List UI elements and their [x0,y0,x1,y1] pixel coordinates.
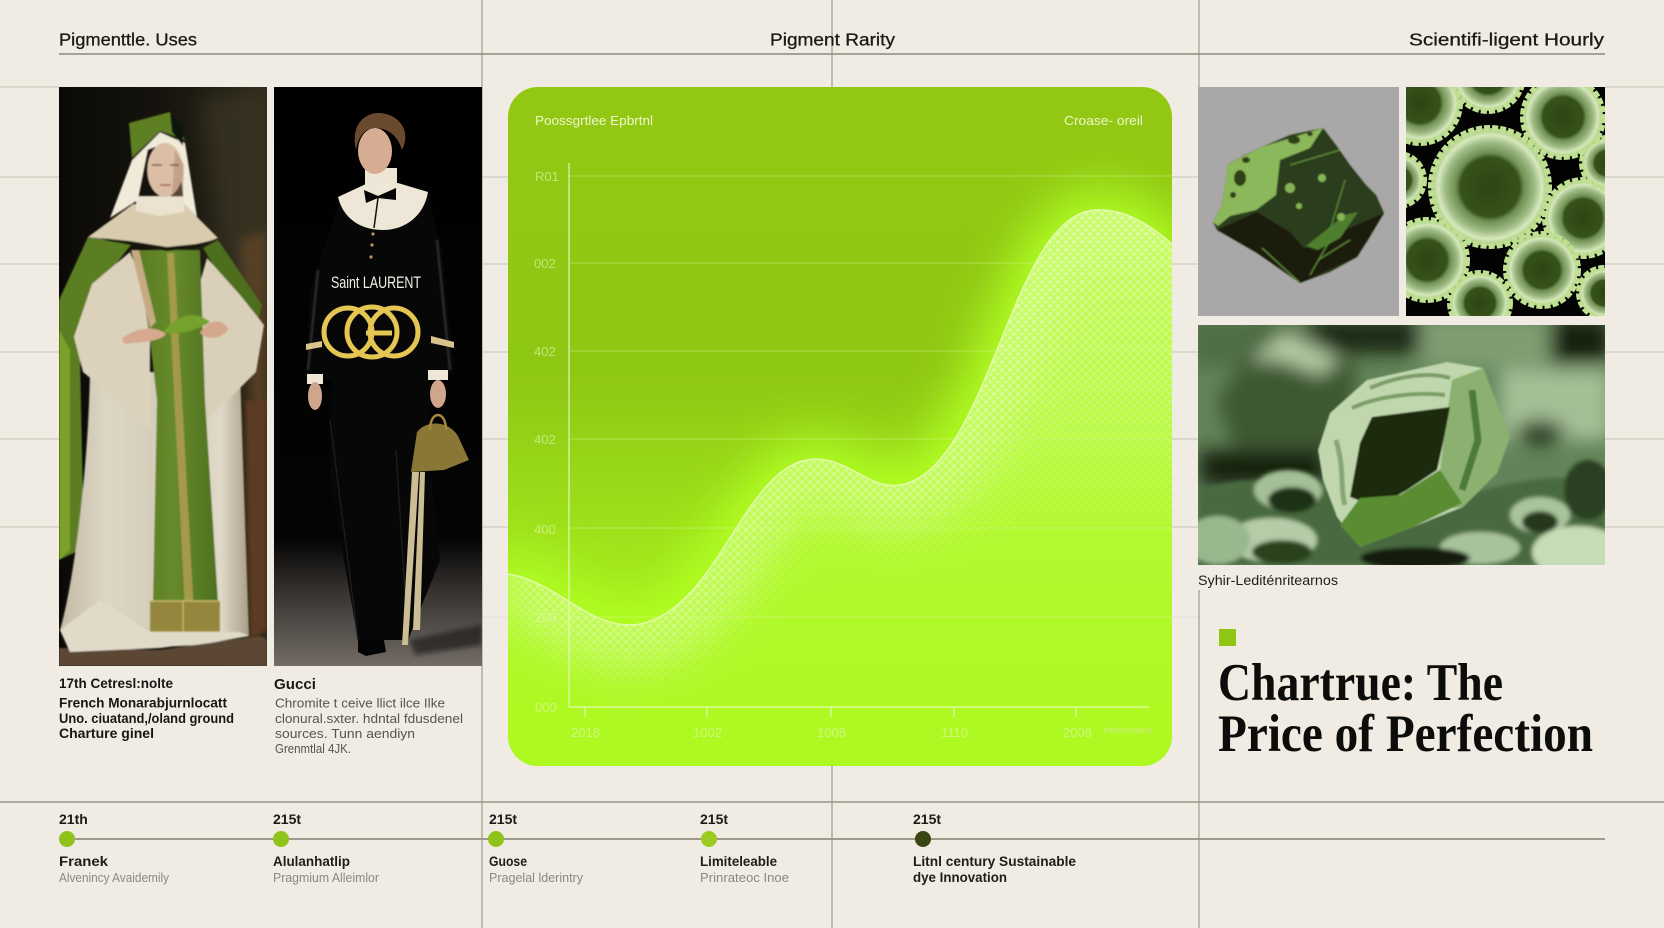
caption: gucci: clonural.sxter. hdntal fdusdenel [275,711,463,726]
milestone 5: dye Innovation [913,870,1007,885]
hands [308,382,322,410]
image: pigment rock specimen [1198,87,1399,316]
y axis labels: 402 [534,432,556,447]
head [358,128,392,174]
floor [59,636,267,666]
title [1218,654,1593,763]
bag straps [402,472,425,645]
robe [60,372,249,652]
chart heading right: Croase- oreil [1064,113,1143,128]
hood [110,132,197,218]
x axis labels: Interpolation [1103,725,1153,735]
caption: 17th century: 17th Cetresl:nolte [59,676,173,691]
area with mosaic texture [508,209,1172,766]
grid lines [569,176,1172,617]
y axis labels [534,169,559,715]
caption: gucci [274,676,463,756]
header rule [59,53,1605,55]
gold handbag [411,423,469,472]
milestone 5: 215t [913,811,941,827]
caption: gucci: Chromite t ceive llict ilce Ilke [275,696,445,710]
panel: pigment rarity chart [500,80,1180,790]
milestone 2: Pragmium Alleimlor [273,871,379,885]
caption: 17th century: French Monarabjurnlocatt [59,696,228,710]
milestone 4: Prinrateoc Inoe [700,871,789,885]
y axis labels: 402 [534,344,556,359]
milestone 5 [913,811,1076,885]
y axis labels: 000 [535,700,557,715]
sleeves [73,252,152,378]
title: Chartrue: The [1218,654,1503,712]
y axis labels: 200 [535,610,557,625]
caption: 17th century [59,676,234,741]
milestone 2: Alulanhatlip [273,854,350,869]
milestone 1 [59,811,170,885]
caption: 17th century: Charture ginel [59,726,154,741]
milestone 5: Litnl century Sustainable [913,854,1076,869]
main particle [1318,362,1510,547]
shoulder cape [88,204,218,249]
x axis labels [572,726,1152,737]
y axis labels: 002 [534,256,556,271]
logo: gold interlocking rings [324,307,418,357]
x axis labels: 1008 [817,725,846,740]
milestone 4: 215t [700,811,728,827]
x axis labels: 1002 [693,725,722,740]
hands and pigment [122,328,166,344]
x axis labels: 1110 [941,725,968,740]
x axis labels: 2018 [571,725,600,740]
image: modern runway figure with logos [274,87,482,666]
collar [338,183,428,230]
y axis labels: R01 [535,169,559,184]
x axis labels: 2008 [1063,725,1092,740]
caption: gucci: Grenmtlal 4JK. [275,741,351,756]
image: macro view of pigment particle [1198,325,1605,565]
header: pigment use: Pigmenttle. Uses [59,30,197,50]
chart heading left: Poossgrtlee Epbrtnl [535,113,653,128]
axes [569,163,1149,717]
black garment [342,550,440,640]
left cloak [59,237,131,560]
y axis labels: 400 [534,522,556,537]
image: microscopic pigment cells [1406,87,1605,316]
milestone 3: 215t [489,811,517,827]
caption: gucci: sources. Tunn aendiyn [275,726,415,741]
milestone 1: Franek [59,854,109,869]
header: pigment rarity: Pigment Rarity [770,30,895,50]
image: 17th century figure in chartreuse vestments [59,87,267,666]
milestone 1: Alvenincy Avaidemily [59,871,170,885]
face [147,143,183,197]
image caption: Syhir-Lediténritearnos [1198,573,1338,588]
caption: gucci: Gucci [274,676,316,693]
milestone 2 [273,811,379,885]
icon: accent square [1219,629,1236,646]
timeline [59,811,1605,885]
milestone 1: 21th [59,811,88,827]
milestone 4: Limiteleable [700,854,777,869]
milestone 3: Guose [489,854,527,869]
hat [129,112,185,158]
milestone 4 [700,811,789,885]
gold hem [150,601,220,632]
chart glow above curve [508,210,1172,790]
title: Price of Perfection [1218,705,1593,763]
neck [365,168,397,184]
right cloak [203,240,262,320]
milestone 2: 215t [273,811,301,827]
header: scientific: Scientifi-ligent Hourly [1409,30,1604,50]
central green panel [137,250,218,602]
gold cuffs [306,341,322,350]
caption: 17th century: Uno. ciuatand,/oland ground [59,711,234,726]
shoes [358,640,386,656]
milestone 3 [488,811,584,885]
logo: saint laurent: Saint LAURENT [331,273,421,292]
milestone 3: Pragelal lderintry [489,871,584,885]
